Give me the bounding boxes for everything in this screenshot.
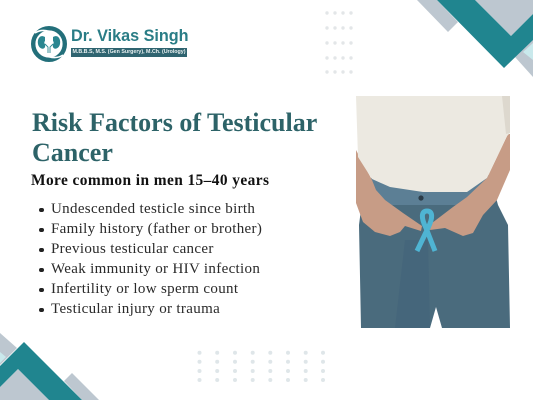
photo: man holding a blue awareness ribbon xyxy=(356,96,510,328)
credentials bar xyxy=(71,48,187,57)
bottom dot grid xyxy=(198,351,325,382)
button xyxy=(418,195,424,201)
right arm and hand xyxy=(430,134,510,236)
icon: logo with kidneys and hands xyxy=(33,28,65,60)
risk factor list: Testicular injury or trauma xyxy=(51,301,220,317)
risk factor list: Infertility or low sperm count xyxy=(51,281,238,297)
risk factor list: Weak immunity or HIV infection xyxy=(51,261,260,277)
sleeve shadow xyxy=(502,96,510,134)
waistband xyxy=(368,175,490,205)
risk factor list: Undescended testicle since birth xyxy=(51,201,255,217)
trousers xyxy=(359,175,510,328)
risk factor list: Previous testicular cancer xyxy=(51,241,214,257)
trouser fold shading xyxy=(395,240,430,328)
bottom-left corner chevrons xyxy=(0,333,99,400)
top-right corner chevrons xyxy=(417,0,533,77)
credentials bar: M.B.B.S, M.S. (Gen Surgery), M.Ch. (Urology) xyxy=(72,49,186,55)
title xyxy=(32,108,317,167)
risk factor list: Family history (father or brother) xyxy=(51,221,262,237)
brand name: Dr. Vikas Singh xyxy=(71,27,189,45)
left arm and hand xyxy=(356,150,422,236)
subtitle: More common in men 15–40 years xyxy=(31,172,269,189)
title: Cancer xyxy=(32,138,113,167)
risk factor list xyxy=(39,201,262,317)
title: Risk Factors of Testicular xyxy=(32,108,317,137)
shirt xyxy=(356,96,510,192)
ribbon xyxy=(417,211,435,251)
top dot grid xyxy=(325,11,353,74)
